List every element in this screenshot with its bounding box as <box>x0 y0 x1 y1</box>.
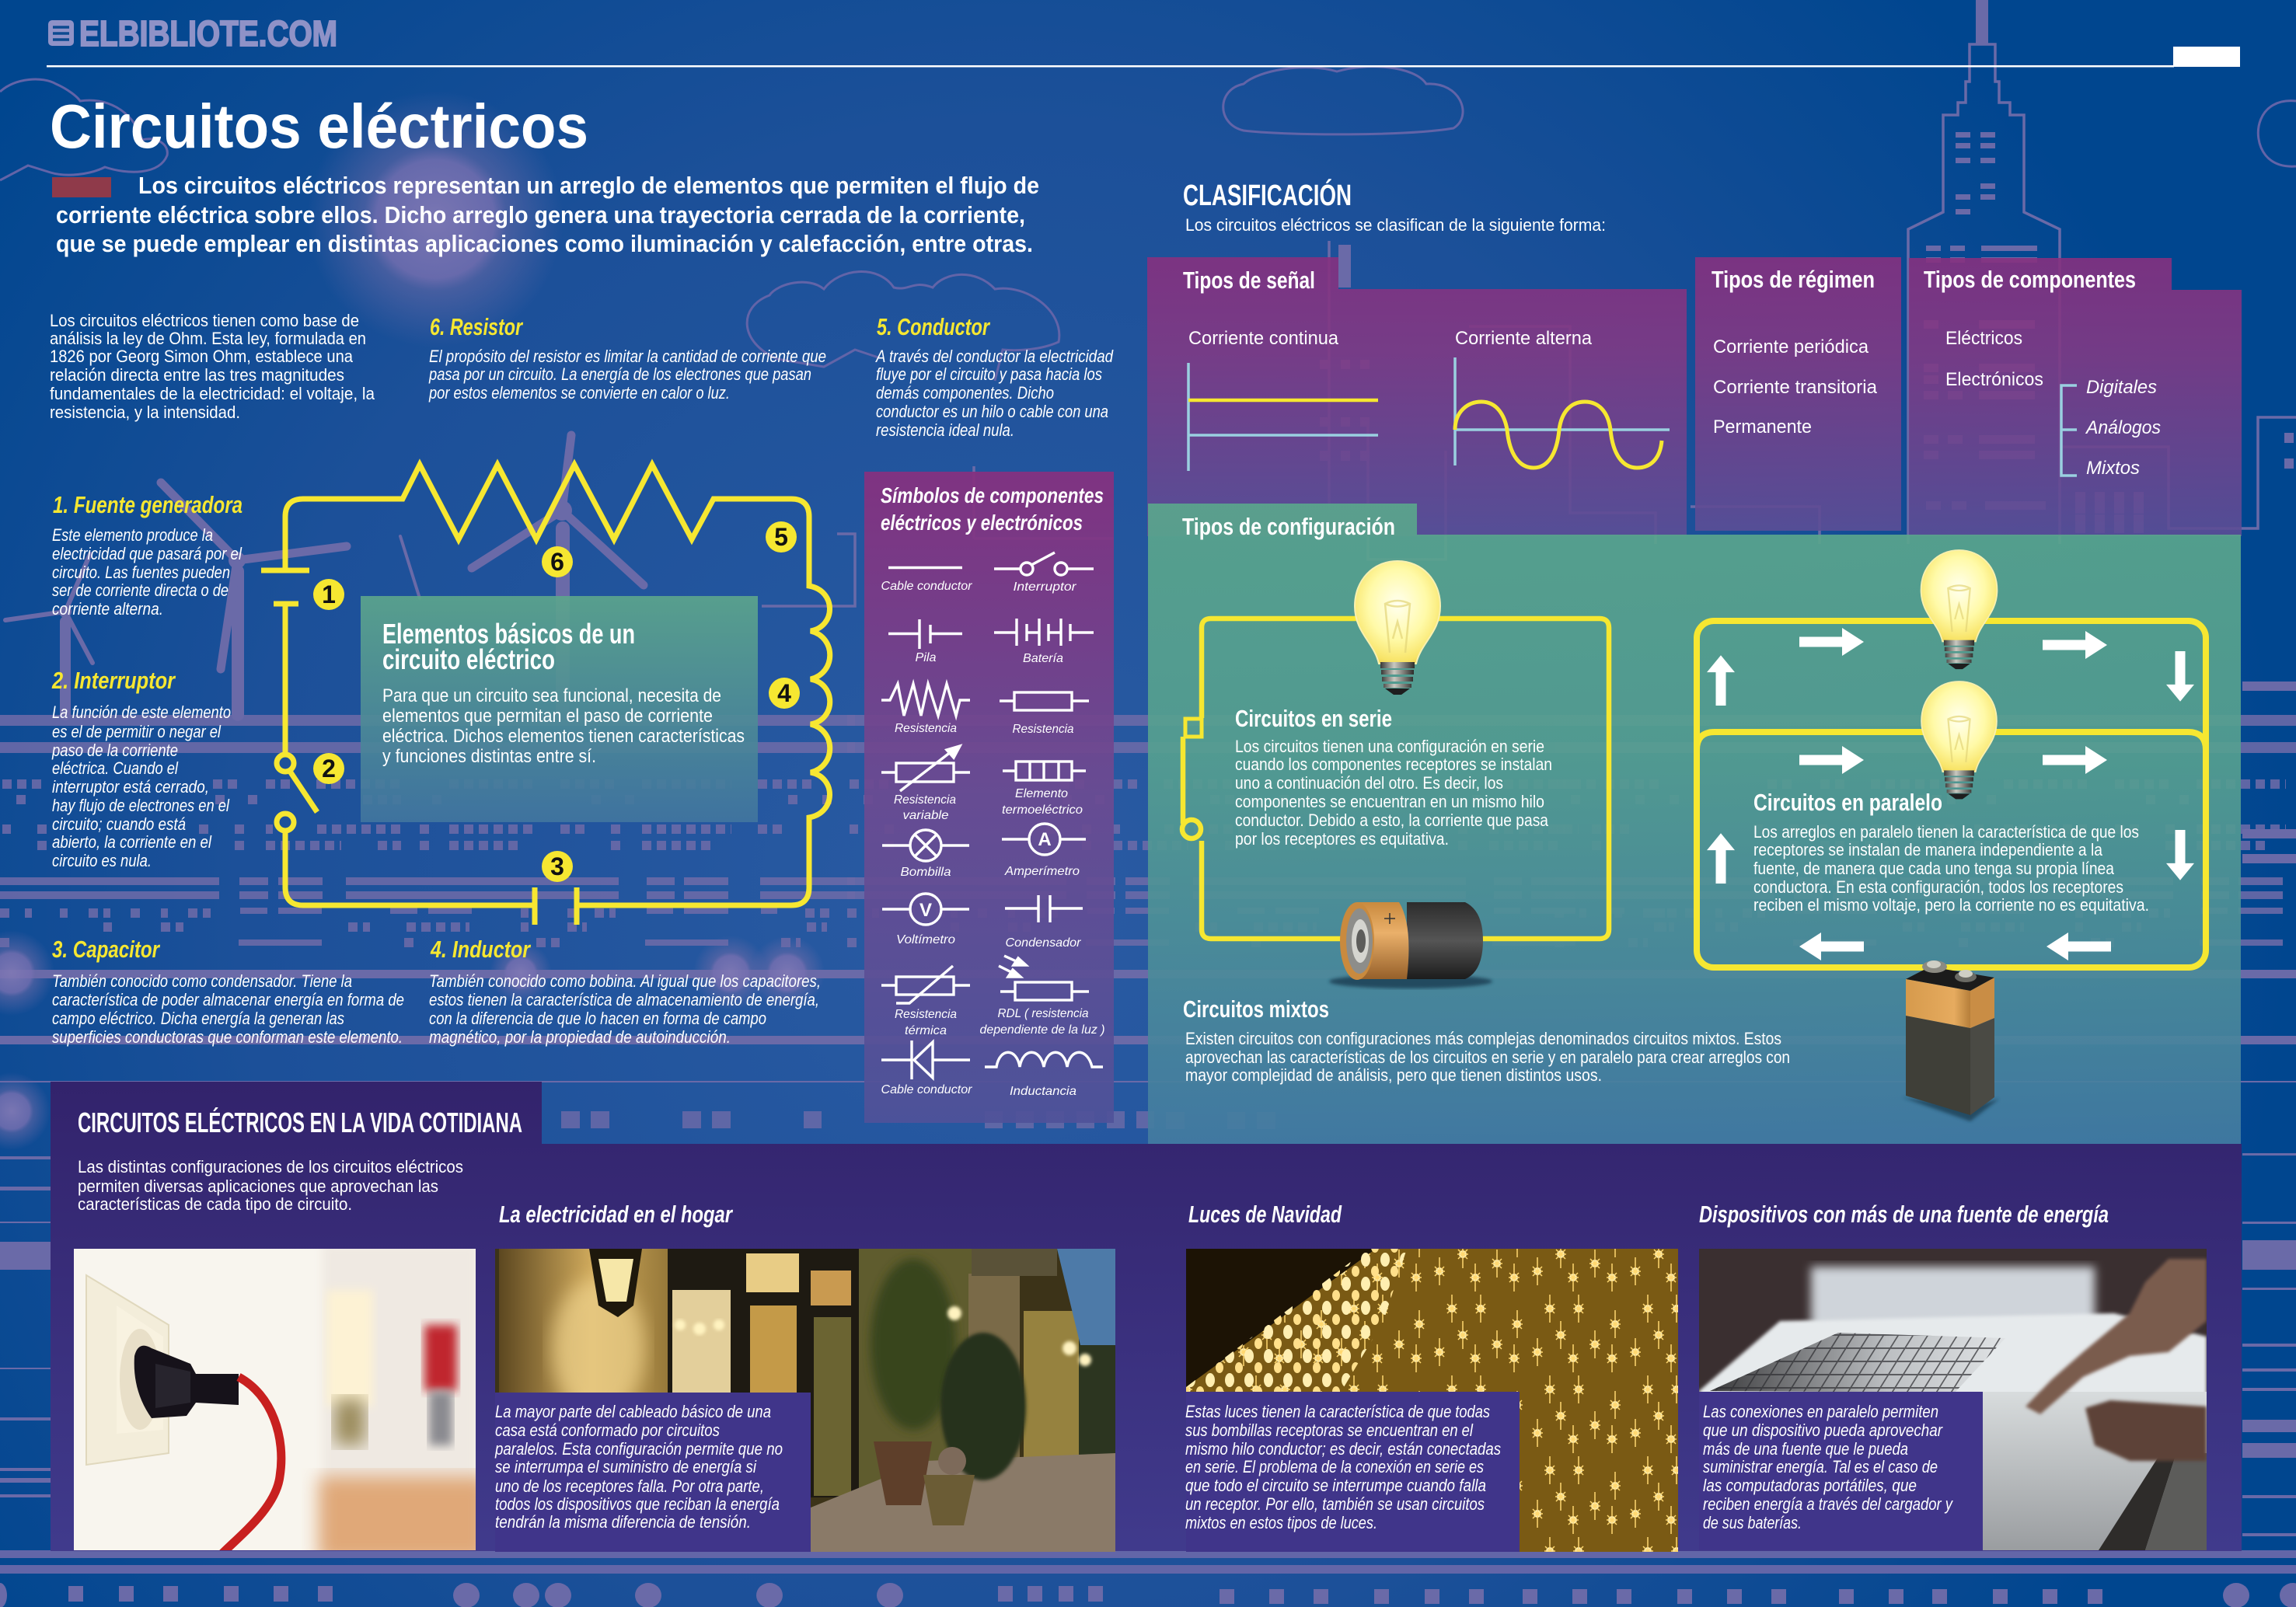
heading: clasificacion: Los circuitos eléctricos se clasifican de la siguiente forma: <box>1185 215 1606 235</box>
panel: tipos de componentes: Análogos <box>2085 417 2161 438</box>
panel: tipos de componentes: Electrónicos <box>1945 369 2043 390</box>
text: 2 interruptor: interruptor está cerrado, <box>52 777 209 797</box>
text: circuitos en paralelo: receptores se instalan de manera independiente a la <box>1753 840 2103 859</box>
text box: navidad: mismo hilo conductor; es decir, están conectadas <box>1185 1439 1501 1459</box>
symbol letters: A <box>1038 829 1052 850</box>
symbol labels: Cable conductor <box>881 1083 972 1096</box>
text box: hogar: paralelos. Esta configuración permite que no <box>494 1439 783 1459</box>
text box: dispositivos: reciben energía a través del cargador y <box>1703 1494 1954 1514</box>
panel: tipos de componentes: Mixtos <box>2086 458 2140 479</box>
text: 4 inductor: con la diferencia de que lo hacen en forma de campo <box>429 1009 766 1028</box>
panel: tipos de senal <box>1147 257 1687 536</box>
text: 1 fuente generadora: ser de corriente directa o de <box>52 580 229 600</box>
text: 5 conductor: fluye por el circuito y pasa hacia los <box>876 364 1102 384</box>
text: circuitos mixtos: aprovechan las características de los circuitos en serie y en paralelo para crear arreglos con <box>1185 1048 1790 1067</box>
series circuit <box>1182 619 1609 939</box>
text: ohm law intro: 1826 por Georg Simon Ohm, establece una <box>50 347 354 366</box>
text box: hogar: casa está conformado por circuitos <box>495 1421 720 1440</box>
bulb: series <box>1355 561 1440 695</box>
circuit number markers: 5 <box>774 523 788 551</box>
text: 2 interruptor: circuito es nula. <box>52 851 152 870</box>
panel: simbolos: Símbolos de componentes <box>881 483 1104 507</box>
symbol labels: Resistencia <box>894 793 956 807</box>
symbol letters: V <box>919 900 932 921</box>
text box: dispositivos <box>1699 1392 1983 1550</box>
text: 4 inductor: 4. Inductor <box>430 936 532 963</box>
text: 5 conductor: demás componentes. Dicho <box>876 383 1054 403</box>
panel: tipos de configuracion <box>1148 504 2241 1144</box>
circuit number markers: 3 <box>550 852 564 880</box>
text box: navidad: en serie. El problema de la conexión en serie es <box>1185 1457 1484 1476</box>
text: circuitos en serie: uno a continuación del otro. Es decir, los <box>1235 773 1503 793</box>
text: 3 capacitor <box>52 936 404 1047</box>
parallel circuit <box>1697 621 2206 967</box>
text: vida cotidiana intro <box>78 1157 463 1214</box>
text: 2 interruptor: es el de permitir o negar el <box>52 722 222 741</box>
panel: elementos basicos <box>361 596 758 822</box>
symbol labels: Inductancia <box>1010 1085 1076 1098</box>
heading: navidad: Luces de Navidad <box>1188 1201 1342 1228</box>
text: circuitos en paralelo: Los arreglos en paralelo tienen la característica de que los <box>1753 822 2139 842</box>
text: 3 capacitor: También conocido como condensador. Tiene la <box>52 971 352 991</box>
text box: hogar <box>494 1393 811 1552</box>
text: circuitos mixtos: mayor complejidad de análisis, pero que tienen distintos usos. <box>1185 1065 1602 1085</box>
text: vida cotidiana intro: permiten diversas aplicaciones que aprovechan las <box>78 1176 438 1196</box>
panel: tipos de componentes: Eléctricos <box>1945 328 2022 349</box>
text: circuitos en paralelo: Circuitos en paralelo <box>1753 789 1942 816</box>
panel: elementos basicos: eléctrica. Dichos elementos tienen características <box>382 726 745 747</box>
panel: elementos basicos: elementos que permitan el paso de corriente <box>382 706 713 727</box>
text box: dispositivos: de sus baterías. <box>1703 1513 1802 1532</box>
text: 4 inductor: También conocido como bobina. Al igual que los capacitores, <box>429 971 821 991</box>
text box: navidad: Estas luces tienen la característica de que todas <box>1185 1402 1490 1421</box>
text: 2 interruptor <box>51 667 231 870</box>
text box: dispositivos: que un dispositivo pueda aprovechar <box>1703 1421 1943 1440</box>
panel: elementos basicos: Para que un circuito sea funcional, necesita de <box>382 685 721 706</box>
text: 3 capacitor: característica de poder almacenar energía en forma de <box>52 990 404 1009</box>
text: 6 resistor: pasa por un circuito. La energía de los electrones que pasan <box>428 364 811 384</box>
text box: hogar: todos los dispositivos que reciban la energía <box>495 1494 780 1514</box>
text: 2 interruptor: abierto, la corriente en el <box>52 832 212 852</box>
panel: tipos de regimen: Permanente <box>1713 417 1812 437</box>
panel: tipos de regimen <box>1695 257 1901 531</box>
photo: laptop <box>1699 1249 2207 1550</box>
text: 1 fuente generadora: electricidad que pasará por el <box>52 544 243 563</box>
symbol labels: Pila <box>916 651 937 664</box>
circuit number markers: 6 <box>550 548 564 576</box>
text box: hogar: La mayor parte del cableado básico de una <box>495 1402 771 1421</box>
text: ohm law intro: análisis la ley de Ohm. Esta ley, formulada en <box>50 329 366 348</box>
intro text: Los circuitos eléctricos representan un arreglo de elementos que permiten el flujo de <box>138 172 1039 199</box>
symbol labels: Voltímetro <box>896 933 955 946</box>
current arrows <box>1707 628 2194 960</box>
circuit number markers: 1 <box>322 580 336 608</box>
header rule and page tab <box>47 47 2240 67</box>
photo: plug <box>74 1243 490 1562</box>
symbol labels: Elemento <box>1015 787 1068 800</box>
symbol labels: dependiente de la luz ) <box>979 1023 1105 1037</box>
symbol labels <box>881 580 1105 1098</box>
text: circuitos mixtos: Circuitos mixtos <box>1183 995 1329 1023</box>
text: ohm law intro: relación directa entre las tres magnitudes <box>50 365 344 385</box>
text: 6 resistor: por estos elementos se convierte en calor o luz. <box>428 383 730 403</box>
chart: corriente continua <box>1188 363 1378 471</box>
text: ohm law intro: Los circuitos eléctricos tienen como base de <box>50 311 359 330</box>
text: 3 capacitor: 3. Capacitor <box>52 936 161 963</box>
text: 5 conductor: conductor es un hilo o cable con una <box>876 402 1108 421</box>
photo: home <box>495 1249 1115 1552</box>
text: 1 fuente generadora: circuito. Las fuentes pueden <box>52 563 230 582</box>
text: 2 interruptor: 2. Interruptor <box>51 667 176 694</box>
panel: tipos de componentes: Tipos de componentes <box>1924 266 2136 293</box>
text: 4 inductor: estos tienen la característica de almacenamiento de energía, <box>429 990 819 1009</box>
symbol labels: Resistencia <box>1012 723 1074 736</box>
symbol letters <box>919 829 1052 921</box>
symbol labels: RDL ( resistencia <box>998 1007 1089 1020</box>
symbol labels: térmica <box>905 1024 947 1037</box>
text box: hogar: se interrumpa el suministro de energía si <box>495 1457 757 1476</box>
panel: tipos de senal: Corriente alterna <box>1455 328 1593 349</box>
text: 2 interruptor: La función de este elemento <box>52 702 231 722</box>
panel: tipos de senal: Corriente continua <box>1188 328 1339 349</box>
text: ohm law intro <box>50 311 375 422</box>
symbol labels: Interruptor <box>1014 580 1076 594</box>
symbol labels: termoeléctrico <box>1002 804 1083 817</box>
symbol labels: Batería <box>1023 652 1063 665</box>
text: 1 fuente generadora: 1. Fuente generadora <box>53 491 243 518</box>
panel: tipos de componentes <box>1909 258 2242 536</box>
text: 6 resistor <box>428 313 826 403</box>
logo: ELBIBLIOTE.COM <box>79 13 337 54</box>
symbol drawings <box>881 553 1103 1079</box>
panel: simbolos <box>864 472 1114 1123</box>
text: 2 interruptor: hay flujo de electrones en el <box>52 796 230 815</box>
heading: hogar: La electricidad en el hogar <box>499 1201 733 1228</box>
text: vida cotidiana intro: Las distintas configuraciones de los circuitos eléctricos <box>78 1157 463 1176</box>
text box: dispositivos: suministrar energía. Tal es el caso de <box>1703 1457 1938 1476</box>
panel: tipos de regimen: Corriente transitoria <box>1713 377 1878 398</box>
text box: dispositivos: las computadoras portátiles, que <box>1703 1476 1917 1495</box>
text: vida cotidiana intro: características de cada tipo de circuito. <box>78 1194 352 1214</box>
symbol labels: Amperímetro <box>1004 865 1080 878</box>
text: 1 fuente generadora: Este elemento produce la <box>52 525 213 545</box>
text: circuitos en serie <box>1235 705 1552 849</box>
text: 4 inductor <box>429 936 821 1047</box>
text box: navidad: mixtos en estos tipos de luces. <box>1185 1513 1377 1532</box>
red intro marker <box>52 177 111 197</box>
text: circuitos en serie: cuando los componentes receptores se instalan <box>1235 755 1552 774</box>
panel: simbolos: eléctricos y electrónicos <box>881 511 1083 535</box>
text: 1 fuente generadora <box>52 491 243 619</box>
bracket <box>2061 385 2077 476</box>
symbol labels: Resistencia <box>895 722 957 735</box>
text box: navidad: un receptor. Por ello, también se usan circuitos <box>1185 1494 1485 1514</box>
text: 6 resistor: El propósito del resistor es limitar la cantidad de corriente que <box>429 347 826 366</box>
panel: elementos basicos: y funciones distintas entre sí. <box>382 746 596 767</box>
text: circuitos en serie: Los circuitos tienen una configuración en serie <box>1235 737 1544 756</box>
text: 1 fuente generadora: corriente alterna. <box>52 599 163 619</box>
text box: hogar: uno de los receptores falla. Por otra parte, <box>495 1476 764 1496</box>
text: 2 interruptor: eléctrica. Cuando el <box>52 758 179 778</box>
heading: clasificacion <box>1183 178 1606 235</box>
text: 5 conductor: A través del conductor la electricidad <box>874 347 1114 366</box>
panel: tipos de regimen: Corriente periódica <box>1713 336 1869 357</box>
panel: tipos de configuracion: Tipos de configuración <box>1182 513 1395 540</box>
intro text: que se puede emplear en distintas aplicaciones como iluminación y calefacción, entre otras. <box>56 230 1033 257</box>
panel: elementos basicos: circuito eléctrico <box>382 643 555 675</box>
text: 2 interruptor: circuito; cuando está <box>52 814 186 834</box>
9v battery <box>1902 960 1999 1121</box>
text: circuitos en paralelo: fuente, de manera que cada uno tenga su propia línea <box>1753 859 2115 878</box>
text: 3 capacitor: superficies conductoras que conforman este elemento. <box>52 1027 403 1047</box>
panel: vida cotidiana <box>51 1082 2242 1562</box>
text: circuitos en serie: componentes se encuentran en un mismo hilo <box>1235 792 1544 811</box>
panel: tipos de componentes: Digitales <box>2086 377 2157 398</box>
text: ohm law intro: fundamentales de la electricidad: el voltaje, la <box>50 384 375 403</box>
text: circuitos en paralelo <box>1753 789 2149 915</box>
panel: tipos de senal: Tipos de señal <box>1183 267 1315 294</box>
circuit number markers <box>313 521 800 882</box>
text: 5 conductor: 5. Conductor <box>877 313 990 340</box>
panel: tipos de regimen: Tipos de régimen <box>1712 266 1875 293</box>
intro text: corriente eléctrica sobre ellos. Dicho arreglo genera una trayectoria cerrada de la corriente, <box>56 201 1025 228</box>
text: circuitos en serie: conductor. Debido a esto, la corriente que pasa <box>1235 810 1549 830</box>
panel: vida cotidiana: CIRCUITOS ELÉCTRICOS EN LA VIDA COTIDIANA <box>78 1107 522 1138</box>
bulb: parallel top <box>1921 550 1997 669</box>
text: 2 interruptor: paso de la corriente <box>51 741 178 760</box>
text: circuitos en serie: por los receptores es equitativa. <box>1235 829 1449 849</box>
panel: elementos basicos: Elementos básicos de un <box>382 618 635 650</box>
symbol labels: Bombilla <box>900 866 951 879</box>
text: 3 capacitor: campo eléctrico. Dicha energía la generan las <box>52 1009 344 1028</box>
symbol labels: Condensador <box>1006 936 1081 950</box>
text: ohm law intro: resistencia, y la intensidad. <box>50 403 240 422</box>
text: 5 conductor <box>874 313 1114 440</box>
text box: dispositivos: Las conexiones en paralelo permiten <box>1703 1402 1938 1421</box>
intro text <box>52 172 1039 257</box>
circuit diagram <box>261 465 830 925</box>
text: circuitos en serie: Circuitos en serie <box>1235 705 1392 732</box>
text box: navidad <box>1185 1392 1520 1552</box>
cell battery <box>1329 902 1492 988</box>
bulb: parallel bottom <box>1921 681 1997 799</box>
text: 6 resistor: 6. Resistor <box>430 313 523 340</box>
heading: clasificacion: CLASIFICACIÓN <box>1183 178 1352 212</box>
symbol labels: Resistencia <box>895 1008 957 1021</box>
symbol labels: variable <box>903 809 949 822</box>
text box: navidad: que todo el circuito se interrumpe cuando falla <box>1185 1476 1486 1495</box>
text: circuitos en paralelo: reciben el mismo voltaje, pero la corriente no es equitativa. <box>1753 895 2149 915</box>
heading: dispositivos: Dispositivos con más de una fuente de energía <box>1699 1201 2109 1228</box>
circuit number markers: 2 <box>322 755 336 783</box>
circuit number markers: 4 <box>777 679 791 707</box>
title: Circuitos eléctricos <box>50 92 588 161</box>
chart: corriente alterna <box>1455 357 1670 468</box>
text box: navidad: sus bombillas receptoras se encuentran en el <box>1185 1421 1474 1440</box>
text: 5 conductor: resistencia ideal nula. <box>876 420 1014 440</box>
text box: dispositivos: más de una fuente que le pueda <box>1703 1439 1908 1459</box>
symbol labels: Cable conductor <box>881 580 972 593</box>
photo: christmas lights <box>1186 1249 1678 1552</box>
text: circuitos mixtos <box>1183 995 1790 1085</box>
text: circuitos mixtos: Existen circuitos con configuraciones más complejas denominados circuitos mixtos. Estos <box>1185 1029 1781 1048</box>
text: 4 inductor: magnético, por la propiedad de autoinducción. <box>429 1027 731 1047</box>
text: circuitos en paralelo: conductora. En esta configuración, todos los receptores <box>1753 877 2123 897</box>
text box: hogar: tendrán la misma diferencia de tensión. <box>495 1512 751 1532</box>
